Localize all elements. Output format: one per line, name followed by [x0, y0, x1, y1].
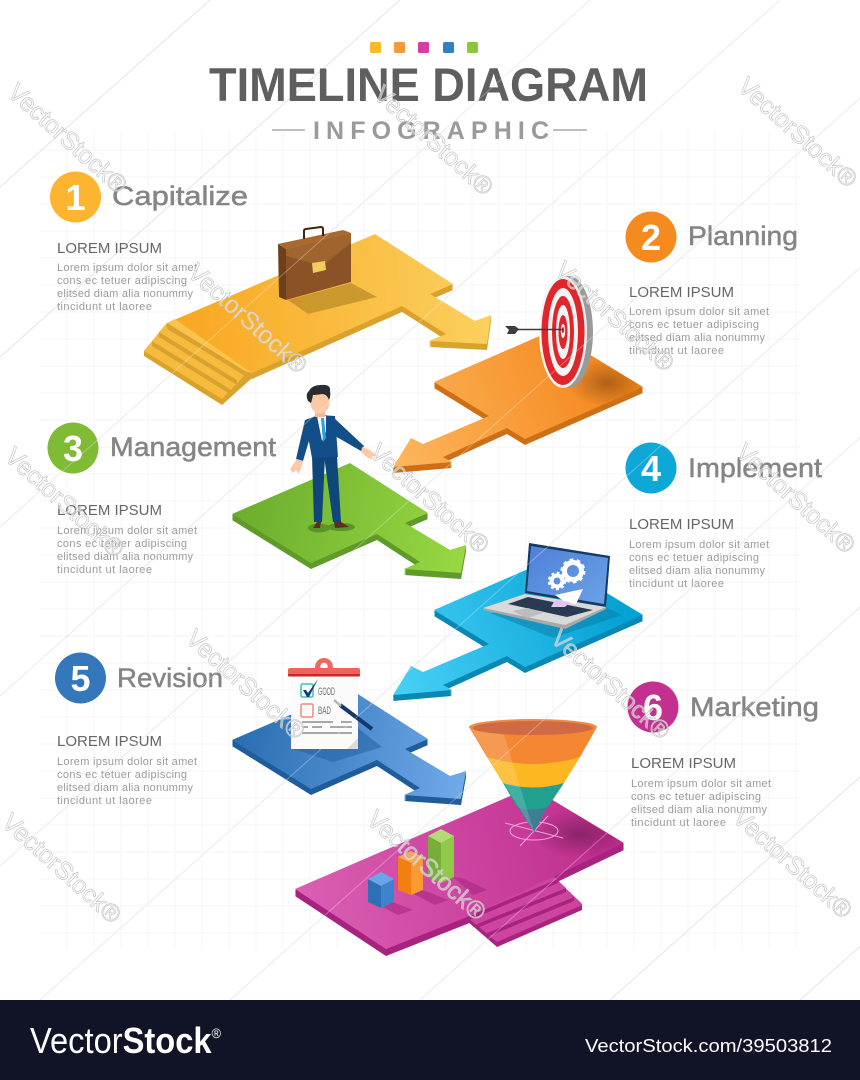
body 5: tincidunt ut laoree: [57, 795, 152, 807]
magenta platform with stairs: [295, 787, 628, 956]
icon: checklist clipboard: [288, 658, 382, 762]
body 2: tincidunt ut laoree: [629, 345, 724, 357]
heading 1: Capitalize: [112, 181, 248, 211]
body 2: [629, 284, 769, 357]
orange bar: [398, 851, 423, 895]
green bar: [428, 829, 454, 883]
body 2: cons ec tetuer adipiscing: [629, 319, 759, 331]
body 4: tincidunt ut laoree: [629, 578, 724, 590]
badge 1: 1: [65, 177, 86, 218]
body 6: Lorem ipsum dolor sit amet: [631, 778, 771, 790]
step 4 text: Implement: [626, 442, 823, 590]
body 3: [57, 502, 197, 576]
bar shadows: [382, 877, 487, 915]
body 3: LOREM IPSUM: [57, 502, 162, 519]
blue platform top: [232, 689, 466, 799]
body 2: Lorem ipsum dolor sit amet: [629, 306, 769, 318]
heading 6: Marketing: [690, 692, 819, 722]
body 2: elitsed diam alia nonummy: [629, 332, 766, 344]
footer logo: ®: [212, 1025, 222, 1041]
body 2: LOREM IPSUM: [629, 284, 734, 301]
watermark: VectorStock stamps: VectorStock®: [727, 803, 858, 925]
footer logo: VectorStock: [30, 1020, 221, 1061]
step 2 text: Planning: [626, 212, 798, 357]
colour dots: [370, 42, 478, 53]
green platform side: [232, 464, 466, 579]
body 1: LOREM IPSUM: [57, 240, 162, 257]
watermark: VectorStock stamps: VectorStock®: [180, 624, 311, 746]
cyan platform top: [393, 559, 643, 695]
body 3: elitsed diam alia nonummy: [57, 551, 194, 563]
title: TIMELINE DIAGRAM: [209, 58, 648, 111]
yellow platform top: [167, 234, 491, 373]
body 5: LOREM IPSUM: [57, 733, 162, 750]
green platform top: [232, 463, 466, 573]
body 1: [57, 240, 197, 313]
funnel target lines: [505, 816, 563, 846]
badge 3: [48, 422, 98, 474]
heading 5: Revision: [117, 663, 223, 693]
magenta platform side: [295, 788, 624, 956]
yellow stairs: [144, 323, 252, 405]
watermark: VectorStock stamps: VectorStock®: [364, 438, 495, 560]
icon: bar chart: [368, 829, 487, 915]
icon: checklist clipboard: BAD: [318, 705, 331, 717]
badge 3: 3: [63, 428, 83, 469]
footer url: VectorStock.com/39503812: [585, 1036, 832, 1056]
title block: [209, 42, 648, 145]
badge 5: [55, 652, 106, 704]
badge 5: 5: [70, 658, 91, 699]
watermark: VectorStock stamps: VectorStock®: [732, 72, 860, 194]
watermark: VectorStock stamps: VectorStock®: [545, 624, 676, 746]
body 6: LOREM IPSUM: [631, 755, 736, 772]
icon: checklist clipboard: GOOD: [318, 686, 335, 698]
body 5: cons ec tetuer adipiscing: [57, 769, 187, 781]
body 4: LOREM IPSUM: [629, 516, 734, 533]
watermark: VectorStock stamps: VectorStock®: [2, 78, 133, 200]
badge 2: 2: [641, 217, 661, 258]
icon: funnel: [469, 719, 597, 832]
funnel shadow: [540, 814, 618, 854]
badge 6: [628, 682, 678, 732]
body 3: Lorem ipsum dolor sit amet: [57, 525, 197, 537]
magenta platform top: [295, 787, 624, 949]
step 3 text: Management: [48, 422, 277, 576]
body 4: cons ec tetuer adipiscing: [629, 552, 759, 564]
body 1: tincidunt ut laoree: [57, 301, 152, 313]
watermark: VectorStock stamps: VectorStock®: [730, 438, 860, 560]
subtitle rules: [272, 129, 587, 131]
orange platform top: [393, 331, 643, 467]
body 1: elitsed diam alia nonummy: [57, 288, 194, 300]
top stair strip: [167, 319, 252, 373]
yellow platform with stairs and arrow: [144, 234, 491, 405]
watermark: VectorStock stamps: VectorStock®: [368, 80, 499, 202]
body 1: Lorem ipsum dolor sit amet: [57, 262, 197, 274]
icon: laptop: [483, 543, 622, 638]
figure: businessman: [290, 385, 377, 532]
blue platform with arrow: [232, 689, 466, 805]
watermark: VectorStock stamps: VectorStock®: [0, 808, 127, 930]
badge 4: [626, 442, 676, 494]
subtitle: INFOGRAPHIC: [313, 117, 549, 145]
step 6 text: Marketing: [628, 682, 819, 829]
heading 3: Management: [110, 432, 277, 462]
badge 6: 6: [643, 687, 663, 728]
body 3: cons ec tetuer adipiscing: [57, 538, 187, 550]
icon: target with dart: [505, 276, 593, 388]
watermark: VectorStock stamps: VectorStock®: [361, 805, 492, 927]
watermark: VectorStock stamps: VectorStock®: [0, 442, 130, 564]
body 5: [57, 733, 197, 807]
step 1 text: Capitalize: [50, 172, 248, 313]
watermark: VectorStock stamps: VectorStock®: [182, 258, 313, 380]
body 4: [629, 516, 769, 590]
heading 2: Planning: [688, 221, 798, 251]
step 5 text: Revision: [55, 652, 223, 807]
orange platform side: [393, 332, 643, 473]
body 5: elitsed diam alia nonummy: [57, 782, 194, 794]
body 4: Lorem ipsum dolor sit amet: [629, 539, 769, 551]
watermark: VectorStock stamps: VectorStock®: [549, 256, 680, 378]
body 6: [631, 755, 771, 829]
body 4: elitsed diam alia nonummy: [629, 565, 766, 577]
green platform with arrow: [232, 463, 466, 579]
heading 4: Implement: [688, 453, 823, 483]
magenta stairs: [467, 875, 582, 947]
body 6: elitsed diam alia nonummy: [631, 804, 768, 816]
blue bar: [368, 872, 394, 908]
body 6: cons ec tetuer adipiscing: [631, 791, 761, 803]
body 3: tincidunt ut laoree: [57, 564, 152, 576]
badge 1: [50, 172, 101, 222]
icon: briefcase: [278, 227, 377, 314]
watermark: VectorStock stamps: [0, 72, 860, 930]
blue platform side: [232, 690, 466, 805]
target shadow: [573, 362, 642, 404]
footer bar: [0, 1000, 860, 1080]
cyan platform with arrow: [393, 559, 643, 701]
body 6: tincidunt ut laoree: [631, 817, 726, 829]
orange platform with arrow: [393, 331, 647, 473]
badge 4: 4: [641, 448, 661, 489]
badge 2: [626, 212, 676, 262]
yellow platform side: [167, 235, 491, 379]
body 1: cons ec tetuer adipiscing: [57, 275, 187, 287]
body 5: Lorem ipsum dolor sit amet: [57, 756, 197, 768]
cyan platform side: [393, 560, 643, 701]
